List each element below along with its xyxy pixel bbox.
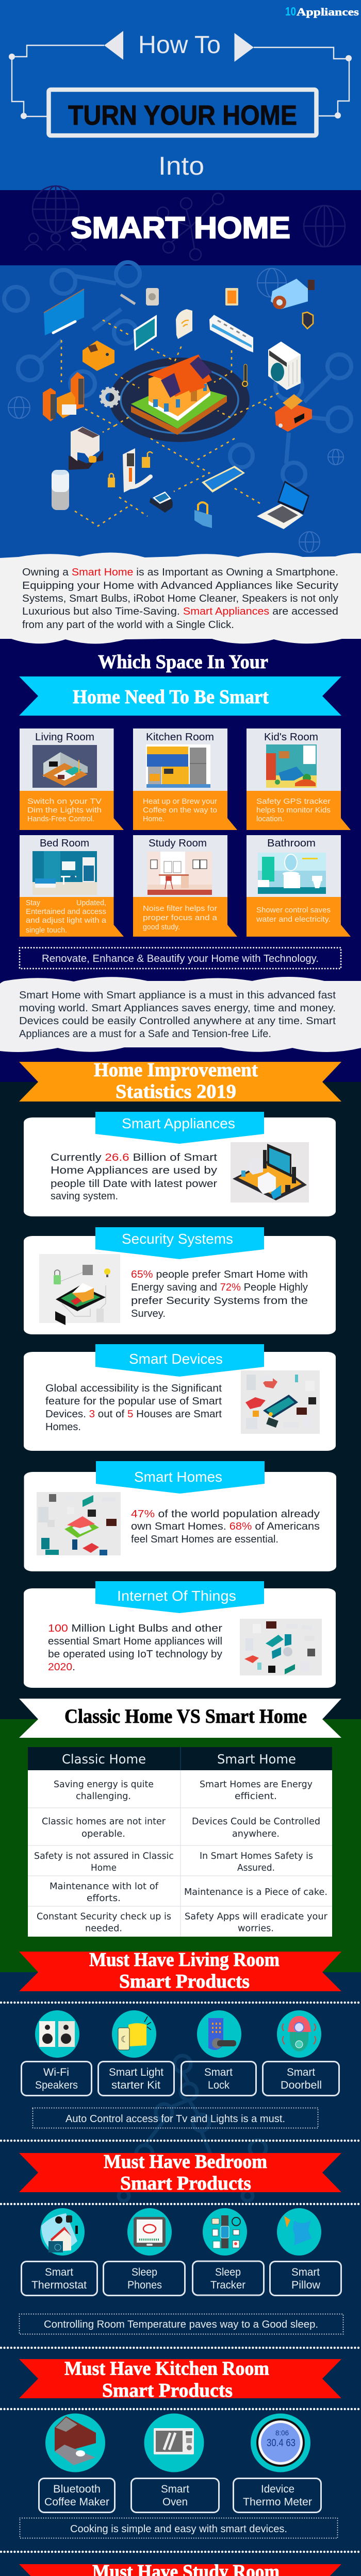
- callout: renovate: [20, 948, 341, 969]
- stat card: smart devices: feature for the popular use of Smart: [45, 1396, 222, 1407]
- product: smart doorbell: Doorbell: [281, 2079, 322, 2091]
- image: kitchen: [146, 744, 210, 788]
- panel: living room: Dim the Lights with: [27, 806, 102, 815]
- ribbon: kitchen products: [19, 2358, 341, 2401]
- stat card: security systems: Survey.: [131, 1308, 166, 1319]
- product: idevice thermometer: Thermo Meter: [243, 2496, 312, 2508]
- icon: washing machine: [268, 342, 301, 390]
- comparison table: Constant Security check up is: [37, 1911, 171, 1922]
- comparison table: anywhere.: [232, 1828, 280, 1839]
- image: kid's room: [266, 744, 317, 788]
- callout: auto control: Auto Control access for Tv and Lights is a must.: [65, 2113, 285, 2125]
- panel: kid's room: Safety GPS tracker: [256, 797, 331, 806]
- intro text cloud: from any part of the world with a Single Click.: [22, 619, 234, 631]
- text cloud: why smart home: Smart Home with Smart appliance is a must in this advanced fast: [19, 990, 336, 1001]
- image: connected devices: [240, 1619, 322, 1675]
- panel: bathroom: water and electricity.: [256, 915, 331, 924]
- stat card: smart devices: [24, 1344, 336, 1451]
- icon: laptop: [257, 481, 309, 529]
- image: study room: [147, 852, 212, 895]
- icon: toaster: [275, 394, 312, 432]
- panel: study room: [133, 835, 237, 937]
- stat card: smart homes: Smart Homes: [134, 1469, 222, 1485]
- ribbon: bedroom products: Must Have Bedroom: [104, 2151, 267, 2173]
- title: turn your home box: TURN YOUR HOME: [68, 100, 297, 131]
- product: sleep phones: [103, 2208, 185, 2296]
- icon: door lock: [123, 448, 151, 493]
- stat card: security systems: Energy saving and 72% People Highly: [131, 1282, 308, 1293]
- stat card: smart homes: [24, 1461, 336, 1571]
- image: bed room: [32, 851, 97, 895]
- icon: gear: [101, 388, 119, 406]
- product: sleep phones: Phones: [127, 2279, 162, 2291]
- product: smart lock: Lock: [208, 2079, 229, 2091]
- panel: living room: [20, 728, 124, 830]
- product: sleep phones: Sleep: [132, 2266, 157, 2278]
- title band: smart home: SMART HOME: [71, 211, 290, 245]
- product: sleep tracker: [193, 2208, 264, 2295]
- icon: security camera: [271, 279, 315, 309]
- icon: robot vacuum: [83, 341, 114, 371]
- product: smart thermostat: Smart: [45, 2266, 73, 2278]
- panel: kitchen room: Home.: [143, 815, 165, 823]
- stat card: smart appliances: Smart Appliances: [122, 1115, 235, 1131]
- panel: bed room: Bed Room: [40, 838, 89, 849]
- product: smart light starter kit: starter Kit: [111, 2079, 160, 2091]
- stat card: internet of things: Internet Of Things: [117, 1588, 236, 1604]
- stat card: internet of things: essential Smart Home appliances will: [48, 1636, 222, 1647]
- comparison table: needed.: [85, 1923, 122, 1934]
- product: smart light starter kit: Smart Light: [109, 2066, 163, 2078]
- comparison table: challenging.: [76, 1791, 131, 1802]
- ribbon: living room products: Must Have Living Room: [89, 1949, 280, 1971]
- intro text cloud: Luxurious but also Time-Saving. Smart Appliances are accessed: [22, 606, 338, 617]
- stat card: security systems: prefer Security Systems from the: [131, 1295, 308, 1307]
- product: smart doorbell: Smart: [287, 2066, 315, 2078]
- title band: smart home: [25, 186, 345, 260]
- comparison table: worries.: [238, 1923, 274, 1934]
- image: bathroom: [258, 853, 326, 894]
- product: smart oven: Smart: [161, 2483, 189, 2495]
- icon: smartphone: [202, 466, 245, 493]
- product: smart pillow: [270, 2208, 341, 2296]
- product: smart doorbell: [263, 2010, 339, 2096]
- stat card: internet of things: be operated using IoT technology by: [48, 1649, 222, 1660]
- icon: monitor: [44, 289, 84, 335]
- product: wi-fi speakers: Wi-Fi: [43, 2066, 69, 2078]
- icon: shield: [303, 312, 313, 329]
- text cloud: why smart home: Appliances are a must for a Safe and Tension-free Life.: [19, 1028, 271, 1040]
- text cloud: why smart home: [0, 977, 361, 1052]
- stat card: smart appliances: Currently 26.6 Billion of Smart: [51, 1152, 218, 1163]
- comparison table: Smart Homes are Energy: [200, 1779, 313, 1790]
- panel: kid's room: location.: [256, 815, 284, 823]
- icon: smart watch: [150, 492, 173, 513]
- panel: kitchen room: Coffee on the way to: [143, 806, 217, 815]
- stat card: smart appliances: Home Appliances are used by: [51, 1165, 217, 1176]
- callout: cooking: Cooking is simple and easy with smart devices.: [70, 2523, 287, 2535]
- image: living room isometric: [32, 745, 97, 788]
- icon: stereo speakers: [43, 372, 84, 421]
- product: idevice thermometer: [233, 2413, 321, 2512]
- panel: living room: Living Room: [35, 732, 94, 743]
- panel: study room: proper focus and a: [143, 913, 218, 922]
- panel: living room: Switch on your TV: [27, 797, 102, 806]
- panel: kitchen room: [133, 728, 237, 830]
- product: smart light starter kit: ☾: [121, 2035, 128, 2044]
- comparison table: Maintenance is a Piece of cake.: [184, 1887, 327, 1897]
- ribbon: home improvement statistics: Statistics 2019: [116, 1081, 236, 1103]
- stat card: smart homes: feel Smart Homes are essential.: [131, 1534, 278, 1545]
- faint network watermark: [79, 2056, 266, 2201]
- stat card: smart devices: Devices. 3 out of 5 Houses are Smart: [45, 1409, 222, 1420]
- text cloud: why smart home: Devices could be easily Controlled anywhere at any time. Smart: [19, 1015, 336, 1027]
- ribbon: bedroom products: [19, 2151, 341, 2194]
- callout: auto control: [33, 2108, 318, 2128]
- product: smart oven: [131, 2413, 219, 2512]
- callout: renovate: Renovate, Enhance & Beautify your Home with Technology.: [42, 953, 319, 964]
- panel: kid's room: helps to monitor Kids: [256, 806, 331, 815]
- stat card: smart appliances: people till Date with latest power: [51, 1178, 217, 1190]
- icon: tablet: [134, 315, 157, 351]
- product: wi-fi speakers: Speakers: [35, 2079, 78, 2091]
- stat card: smart devices: Global accessibility is the Significant: [45, 1383, 222, 1394]
- brand logo top: 10: [285, 5, 296, 18]
- comparison table: efficient.: [235, 1791, 277, 1802]
- product: smart pillow: Smart: [291, 2266, 320, 2278]
- panel: kid's room: [247, 728, 351, 830]
- panel: bathroom: Shower control saves: [256, 906, 331, 914]
- intro text cloud: Owning a Smart Home is as Important as Owning a Smartphone.: [22, 567, 338, 578]
- ribbon: home need to be smart: Home Need To Be Smart: [73, 686, 269, 708]
- icon: thermometer: [242, 364, 248, 386]
- panel: kitchen room: Kitchen Room: [146, 732, 214, 743]
- callout: room temperature: Controlling Room Temperature paves way to a Good sleep.: [44, 2319, 318, 2330]
- stat card: smart appliances: [24, 1112, 336, 1216]
- ribbon: home improvement statistics: [19, 1059, 341, 1103]
- panel: kitchen room: Heat up or Brew your: [143, 797, 217, 806]
- comparison table: operable.: [81, 1828, 125, 1839]
- heading: which space: Which Space In Your: [98, 651, 268, 673]
- icon: yellow padlocks: [108, 452, 153, 487]
- product: bluetooth coffee maker: Bluetooth: [53, 2483, 101, 2495]
- title: how to with connector lines: How To: [138, 31, 221, 59]
- ribbon: bedroom products: Smart Products: [120, 2173, 251, 2194]
- ribbon: living room products: Smart Products: [119, 1971, 250, 1992]
- image: devices around phone: [241, 1370, 320, 1434]
- panel: bed room: and adjust light with a: [26, 916, 107, 925]
- comparison table: Maintenance with lot of: [50, 1881, 159, 1892]
- callout: cooking: [20, 2518, 337, 2538]
- stat card: security systems: [24, 1227, 336, 1334]
- house on platform: [131, 354, 227, 435]
- ribbon: kitchen products: Smart Products: [102, 2380, 233, 2401]
- title: turn your home box: [48, 90, 317, 135]
- stat card: security systems: 65% people prefer Smart Home with: [131, 1269, 308, 1280]
- panel: kid's room: Kid's Room: [264, 732, 318, 743]
- intro text cloud: [0, 552, 361, 644]
- icon: plug and socket: [121, 288, 159, 306]
- product: wi-fi speakers: [22, 2010, 92, 2096]
- ribbon: kitchen products: Must Have Kitchen Room: [64, 2358, 269, 2379]
- icon: coffee machine: [69, 427, 103, 470]
- icon: air conditioner: [209, 315, 253, 352]
- panel: study room: good study.: [143, 923, 180, 931]
- ribbon: home need to be smart: [19, 676, 341, 716]
- panel: study room: Noise filter helps for: [143, 904, 217, 913]
- panel: bathroom: [247, 835, 351, 937]
- icon: router: [176, 309, 192, 339]
- ribbon: classic vs smart: Classic Home VS Smart Home: [64, 1705, 307, 1727]
- panel: bed room: single touch.: [26, 926, 67, 935]
- product: idevice thermometer: 30.4 63: [267, 2437, 296, 2449]
- brand logo top: [285, 5, 359, 18]
- panel: bed room: Stay: [26, 899, 40, 907]
- ribbon: living room products: [19, 1949, 341, 1992]
- product: smart oven: Oven: [162, 2496, 188, 2508]
- comparison table: efforts.: [87, 1893, 121, 1904]
- product: smart thermostat: Thermostat: [31, 2279, 87, 2291]
- product: smart thermostat: [22, 2208, 97, 2296]
- ribbon: home improvement statistics: Home Improvement: [94, 1059, 258, 1081]
- product: bluetooth coffee maker: [39, 2413, 114, 2512]
- panel: living room: Hands-Free Control.: [27, 815, 94, 823]
- product: idevice thermometer: Idevice: [261, 2483, 294, 2495]
- stat card: internet of things: 2020.: [48, 1662, 75, 1673]
- product: bluetooth coffee maker: Coffee Maker: [44, 2496, 109, 2508]
- stat card: smart homes: 47% of the world population already: [131, 1509, 320, 1520]
- comparison table: Devices Could be Controlled: [192, 1816, 320, 1827]
- panel: bed room: [20, 835, 124, 937]
- stat card: internet of things: 100 Million Light Bulbs and other: [48, 1623, 222, 1634]
- comparison table: Assured.: [237, 1862, 275, 1873]
- panel: bed room: Entertained and access: [26, 907, 106, 916]
- stat card: internet of things: [24, 1581, 336, 1688]
- comparison table: In Smart Homes Safety is: [200, 1851, 313, 1861]
- hero illustration: smart home network: [4, 262, 351, 552]
- product: smart lock: Smart: [204, 2066, 233, 2078]
- intro text cloud: Systems, Smart Bulbs, iRobot Home Cleaner, Speakers is not only: [22, 593, 338, 604]
- title: how to with connector lines: [9, 31, 352, 119]
- comparison table: Safety is not assured in Classic: [34, 1851, 174, 1861]
- product: sleep tracker: Tracker: [210, 2279, 245, 2291]
- comparison table: [28, 1747, 332, 1937]
- stat card: smart homes: own Smart Homes. 68% of Americans: [131, 1521, 320, 1532]
- icon: wall switch: [225, 288, 238, 306]
- product: sleep tracker: Sleep: [215, 2266, 241, 2278]
- ribbon: study room products: [19, 2561, 341, 2576]
- product: smart light starter kit: [98, 2010, 174, 2096]
- callout: room temperature: [20, 2314, 343, 2334]
- stat card: security systems: Security Systems: [122, 1231, 233, 1247]
- stat card: smart devices: Smart Devices: [129, 1351, 223, 1367]
- comparison table: Classic Home: [62, 1752, 146, 1767]
- comparison table: Home: [91, 1862, 117, 1873]
- comparison table: Saving energy is quite: [54, 1779, 154, 1790]
- product: idevice thermometer: 8:06: [275, 2429, 289, 2437]
- text cloud: why smart home: moving world. Smart Appliances saves energy, time and money.: [19, 1003, 336, 1014]
- image: secured house: [39, 1254, 120, 1325]
- stat card: smart devices: Homes.: [45, 1421, 81, 1433]
- panel: bed room: Updated,: [76, 899, 106, 907]
- icon: smart speaker: [52, 470, 69, 510]
- comparison table: Classic homes are not inter: [42, 1816, 166, 1827]
- image: smart house with devices: [37, 1492, 121, 1555]
- comparison table: Safety Apps will eradicate your: [185, 1911, 328, 1922]
- intro text cloud: Equipping your Home with Advanced Appliances like Security: [22, 580, 338, 591]
- brand logo top: Appliances: [297, 6, 359, 18]
- title: into: Into: [158, 151, 204, 180]
- icon: blue padlock: [194, 502, 212, 528]
- product: smart pillow: Pillow: [291, 2279, 321, 2291]
- panel: study room: Study Room: [149, 838, 207, 849]
- panel: bathroom: Bathroom: [267, 838, 316, 849]
- product: smart lock: [182, 2010, 256, 2096]
- comparison table: Smart Home: [217, 1752, 296, 1767]
- ribbon: classic vs smart: [19, 1699, 341, 1738]
- stat card: smart appliances: saving system.: [51, 1191, 118, 1202]
- image: appliances on tablet: [231, 1142, 309, 1202]
